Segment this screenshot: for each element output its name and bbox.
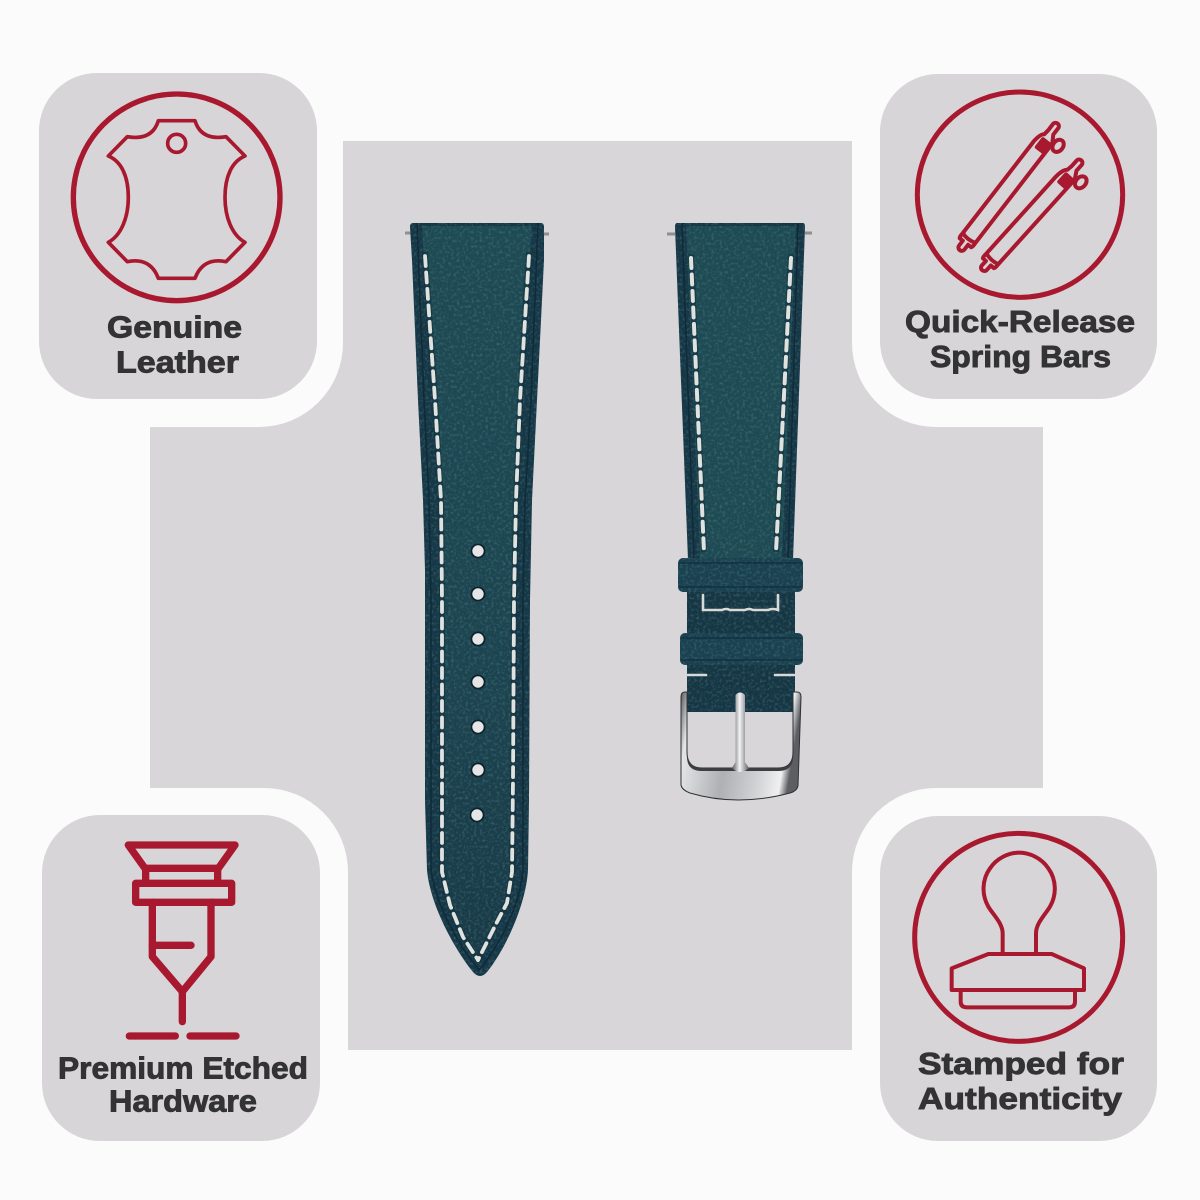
holes <box>470 544 485 822</box>
icon: leather hide in circle <box>73 94 280 301</box>
label: Premium Etched Hardware: Premium Etched <box>58 1050 308 1086</box>
label: Premium Etched Hardware <box>58 1050 308 1118</box>
panel: stamped for authenticity <box>880 816 1157 1141</box>
label: Genuine Leather: Leather <box>116 344 239 380</box>
white halo: top left <box>11 45 343 427</box>
stitching shadow <box>691 254 791 552</box>
strap body <box>410 223 544 976</box>
stitching <box>691 258 791 552</box>
tile background <box>42 815 320 1141</box>
upper strap <box>675 223 805 712</box>
long strap with holes <box>405 223 549 976</box>
panel: quick-release spring bars <box>880 74 1157 399</box>
white halo: bottom left <box>14 788 348 1169</box>
icon: laser etching nozzle <box>128 845 236 1036</box>
label: Stamped for Authenticity: Stamped for <box>918 1046 1124 1081</box>
label: Quick-Release Spring Bars <box>905 304 1135 374</box>
spring bar pins <box>405 233 549 234</box>
label: Stamped for Authenticity: Authenticity <box>918 1081 1123 1116</box>
icon: spring bars in circle <box>917 92 1123 297</box>
white halo: bottom right <box>852 788 1185 1169</box>
label: Premium Etched Hardware: Hardware <box>109 1084 257 1118</box>
label: Genuine Leather: Genuine <box>107 310 242 344</box>
keepers <box>678 558 803 665</box>
icon: rubber stamp in circle <box>915 833 1123 1041</box>
label: Genuine Leather <box>107 310 242 380</box>
white halo: top right <box>852 46 1185 427</box>
buckle <box>681 692 801 800</box>
tile background <box>880 816 1157 1141</box>
label: Quick-Release Spring Bars: Spring Bars <box>930 339 1111 374</box>
label: Quick-Release Spring Bars: Quick-Release <box>905 304 1135 339</box>
lower stitch <box>688 595 794 675</box>
buckle strap with keepers <box>667 223 812 800</box>
spring bar pins <box>667 233 812 234</box>
tile background <box>39 73 317 399</box>
panel: premium etched hardware <box>42 815 320 1141</box>
stitching shadow <box>425 252 529 960</box>
panel: genuine leather <box>39 73 317 399</box>
stitching <box>425 256 529 960</box>
central grey cross panel <box>150 141 1043 1050</box>
tile background <box>880 74 1157 399</box>
label: Stamped for Authenticity <box>918 1046 1124 1116</box>
